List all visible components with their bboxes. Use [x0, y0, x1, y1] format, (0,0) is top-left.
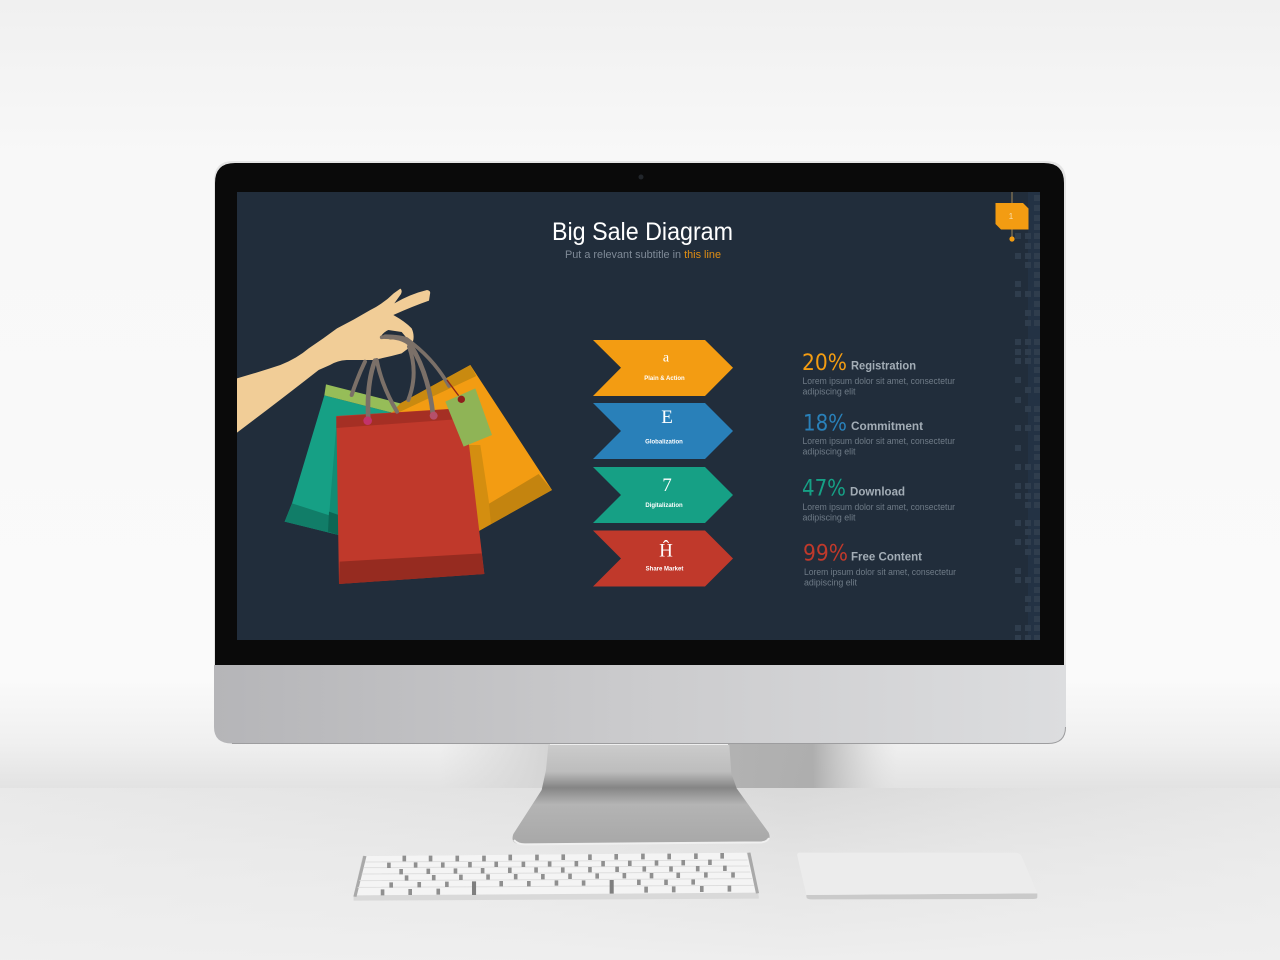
desk surface	[0, 788, 1280, 960]
wall shadow left of stand	[440, 744, 550, 788]
key gaps	[383, 853, 733, 895]
tag hole	[458, 396, 465, 403]
badge number: 1	[1009, 212, 1014, 221]
arrow: Globalization	[593, 403, 733, 459]
teal shopping bag	[285, 384, 400, 535]
stat value: 18%	[803, 412, 847, 436]
badge tag	[996, 203, 1028, 230]
red shopping bag	[336, 408, 484, 584]
keyboard base	[354, 853, 759, 901]
title: Big Sale Diagram	[552, 218, 733, 246]
price tag	[445, 388, 492, 447]
page number badge	[996, 192, 1028, 242]
teal bag bottom corner	[328, 512, 339, 535]
stat value: 20%	[802, 351, 847, 376]
slide screen	[237, 192, 1040, 640]
stat label: Free Content	[851, 550, 922, 564]
teal bag bottom band	[285, 503, 339, 535]
tag string	[447, 380, 461, 399]
arrow shape red	[593, 530, 733, 586]
orange bag top band	[387, 365, 476, 412]
hand finger gap	[380, 330, 407, 339]
stat: 99% Free Content	[803, 542, 956, 587]
trackpad	[797, 853, 1037, 899]
orange shopping bag	[387, 365, 552, 532]
stat description: Lorem ipsum dolor sit amet, consectetur	[802, 502, 955, 512]
arrow label: Plain & Action	[644, 376, 685, 382]
orange bag bottom band	[476, 474, 552, 532]
arrow shape blue	[593, 403, 733, 459]
stat label: Commitment	[851, 419, 923, 433]
decorative pixel pattern	[1015, 192, 1040, 641]
arrow: Digitalization	[593, 467, 733, 523]
stat description: adipiscing elit	[804, 577, 857, 587]
stat description: Lorem ipsum dolor sit amet, consectetur	[802, 436, 955, 446]
icon glyph: a	[663, 350, 670, 366]
hand and forearm	[237, 289, 430, 433]
monitor black bezel	[215, 163, 1064, 665]
red bag body	[336, 408, 484, 584]
icon glyph: E	[661, 407, 673, 428]
subtitle: Put a relevant subtitle in this line	[565, 249, 721, 261]
monitor stand	[512, 745, 770, 844]
monitor silver edge	[214, 161, 1066, 666]
stat: 47% Download	[802, 477, 955, 523]
arrow list	[593, 340, 733, 586]
long key gaps	[474, 880, 612, 895]
arrow label: Digitalization	[645, 503, 683, 509]
keyboard keys surface	[356, 853, 757, 895]
stat label: Registration	[851, 358, 916, 372]
webcam	[638, 174, 644, 180]
illustration: hand holding shopping bags	[237, 289, 552, 584]
chin lower edge	[232, 727, 1066, 744]
teal bag top band	[324, 384, 400, 413]
orange bag body	[387, 365, 552, 532]
teal bag body	[285, 395, 392, 535]
arrow label: Share Market	[646, 566, 683, 572]
stat: 20% Registration	[802, 351, 955, 396]
infographic: monitor mockup scene	[0, 161, 1280, 902]
badge connector line	[1011, 192, 1013, 238]
stat value: 99%	[803, 542, 848, 567]
stat: 18% Commitment	[802, 412, 955, 457]
stat description: Lorem ipsum dolor sit amet, consectetur	[804, 567, 956, 577]
trackpad edge	[806, 893, 1037, 899]
arrow: Share Market	[593, 530, 733, 586]
red bag bottom band	[339, 553, 484, 584]
stand body	[512, 745, 770, 844]
key row lines	[358, 860, 754, 887]
monitor chin	[214, 665, 1066, 744]
teal bag inner side	[328, 417, 339, 535]
keyboard	[354, 853, 759, 901]
arrow shape green	[593, 467, 733, 523]
keyboard left and right edges	[355, 853, 757, 897]
stand base lip	[514, 838, 769, 844]
bag eyelets	[363, 412, 438, 425]
stat label: Download	[850, 485, 905, 499]
orange bag inner side	[467, 445, 491, 532]
wall shadow right of stand	[728, 744, 898, 788]
arrow: Plain & Action	[593, 340, 733, 396]
stat description: adipiscing elit	[802, 447, 856, 457]
arrow shape orange	[593, 340, 733, 396]
stat value: 47%	[802, 477, 846, 502]
arrow label: Globalization	[645, 440, 683, 446]
stat description: adipiscing elit	[802, 513, 856, 523]
trackpad surface	[797, 853, 1037, 895]
badge connector dot	[1009, 236, 1015, 242]
desk lighting fade	[0, 788, 1280, 960]
statistics list	[802, 351, 956, 587]
icon glyph: Ĥ	[659, 540, 673, 562]
icon glyph: 7	[662, 475, 672, 496]
red bag top band	[336, 409, 460, 428]
monitor	[214, 161, 1066, 744]
stat description: Lorem ipsum dolor sit amet, consectetur	[802, 376, 955, 386]
stat description: adipiscing elit	[802, 386, 856, 396]
bag handles	[352, 337, 449, 420]
